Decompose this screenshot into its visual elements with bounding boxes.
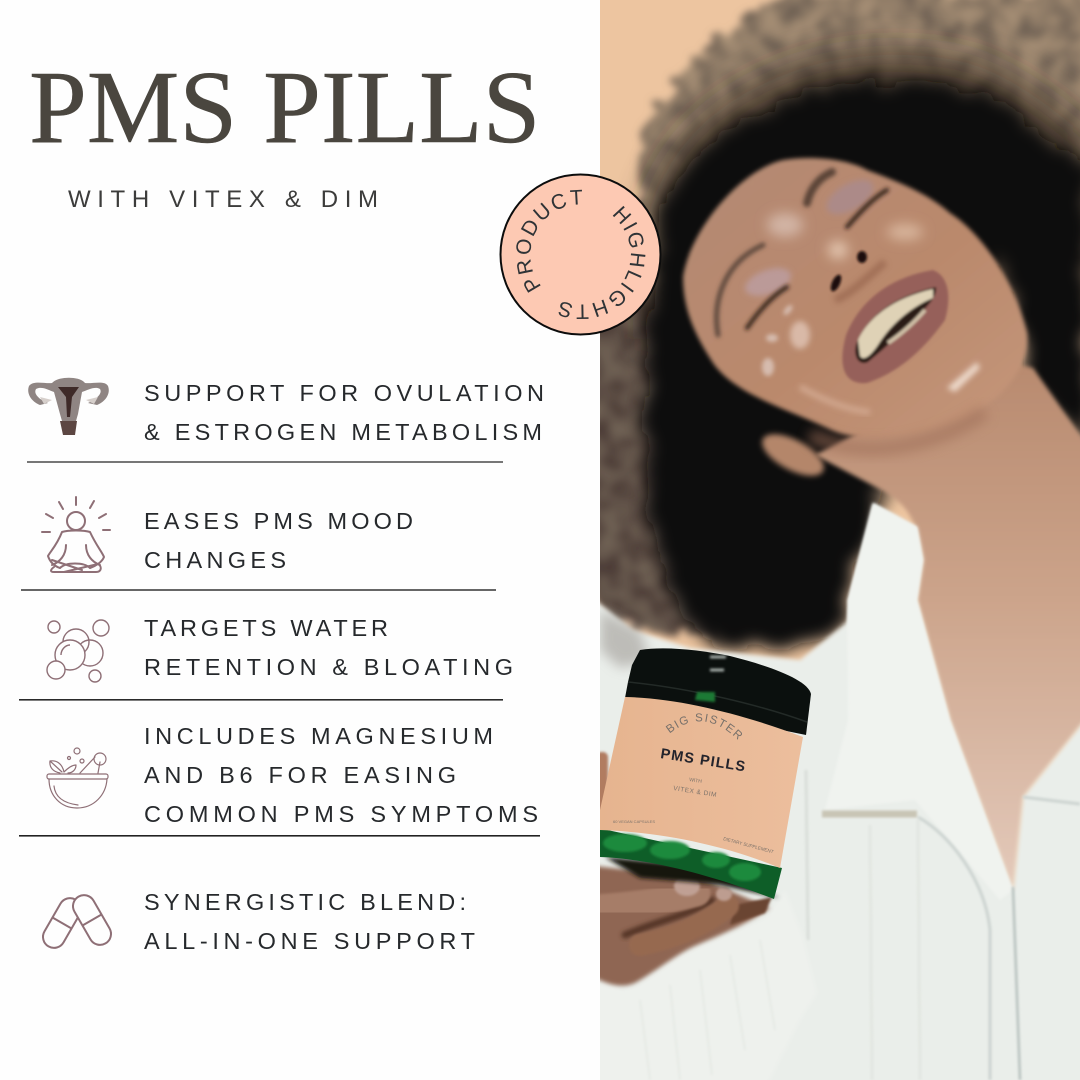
neck and chest xyxy=(815,360,1080,890)
title: PMS PILLS xyxy=(29,50,541,165)
pocket seam and shirt folds xyxy=(806,770,1080,1080)
curly hair over shirt at left xyxy=(600,610,650,668)
hand xyxy=(595,752,772,986)
ear xyxy=(758,430,828,480)
jar lid xyxy=(625,648,811,735)
shadow under jar xyxy=(605,857,780,898)
jar capsules xyxy=(598,828,782,899)
jar label text: PMS PILLS xyxy=(659,746,747,775)
hair: lower left curls xyxy=(600,289,718,642)
list item 5: synergistic blend: ALL-IN-ONE SUPPORT xyxy=(144,928,475,954)
list item 3: water retention: RETENTION & BLOATING xyxy=(144,654,513,680)
thumb xyxy=(600,750,610,810)
face xyxy=(683,158,1027,438)
icon: uterus xyxy=(28,378,109,435)
nose shadow xyxy=(835,262,885,300)
hair: dark core xyxy=(645,80,1080,649)
white shirt body xyxy=(595,503,1080,1080)
fingernails xyxy=(674,876,700,896)
list item 4: magnesium and B6: COMMON PMS SYMPTOMS xyxy=(144,801,538,827)
badge text: HIGHLIGHTS: HIGHLIGHTS xyxy=(558,206,646,319)
subtitle: WITH VITEX & DIM xyxy=(68,186,378,213)
sleeve xyxy=(590,890,817,1080)
photo: woman laughing holding PMS Pills jar xyxy=(600,0,1080,1080)
jar highlights xyxy=(695,692,715,702)
nose bridge highlights xyxy=(767,213,923,259)
index finger xyxy=(596,893,697,908)
list item 4: magnesium and B6: AND B6 FOR EASING xyxy=(144,762,456,788)
list item 4: magnesium and B6 xyxy=(47,723,538,827)
nostrils xyxy=(829,251,867,293)
shadow by palm xyxy=(730,897,772,925)
sleeve ribs xyxy=(640,940,775,1080)
hair: frizzy outer edge xyxy=(637,0,1080,320)
text: INCLUDES MAGNESIUM xyxy=(144,723,493,749)
eye shadow xyxy=(743,179,874,298)
middle finger xyxy=(640,906,728,945)
text: EASES PMS MOOD xyxy=(144,508,413,534)
list item 1: ovulation and estrogen: & ESTROGEN METABOLISM xyxy=(144,419,542,445)
icon: mortar and pestle xyxy=(47,748,108,808)
jar label text: DIETARY SUPPLEMENT xyxy=(723,836,774,854)
text: TARGETS WATER xyxy=(144,615,388,641)
badge: product highlights xyxy=(500,174,662,336)
mouth xyxy=(842,270,948,383)
jar label text xyxy=(613,713,774,853)
jar lid groove xyxy=(628,682,807,722)
badge text: PRODUCT: PRODUCT xyxy=(516,190,582,293)
jar xyxy=(600,648,811,900)
jaw shadow xyxy=(810,412,985,449)
list item 2: mood: CHANGES xyxy=(144,547,286,573)
jar label text: 60 VEGAN CAPSULES xyxy=(613,819,655,824)
list item 2: mood xyxy=(42,497,413,573)
icon: two capsules xyxy=(39,891,115,952)
shirt collar xyxy=(845,502,1012,889)
palm xyxy=(595,866,770,986)
list item 3: water retention xyxy=(47,615,513,682)
page background xyxy=(0,0,600,1080)
chin highlight xyxy=(800,387,870,412)
jar label xyxy=(600,697,803,868)
text: SYNERGISTIC BLEND: xyxy=(144,889,466,915)
icon: meditating person xyxy=(42,497,110,572)
jar label text: WITH xyxy=(689,777,703,785)
list item 5: synergistic blend xyxy=(39,889,475,954)
jar label text: VITEX & DIM xyxy=(673,785,717,799)
list item 1: ovulation and estrogen xyxy=(28,378,544,445)
sparkle makeup xyxy=(762,303,794,376)
icon: bubbles xyxy=(47,620,109,682)
dark gap between fingers xyxy=(625,900,712,935)
hair: soft shadow band xyxy=(650,55,1080,340)
text: SUPPORT FOR OVULATION xyxy=(144,380,544,406)
jar label text: BIG SISTER xyxy=(666,713,742,740)
cheek highlights xyxy=(790,321,980,392)
eyes and brows xyxy=(717,172,887,335)
